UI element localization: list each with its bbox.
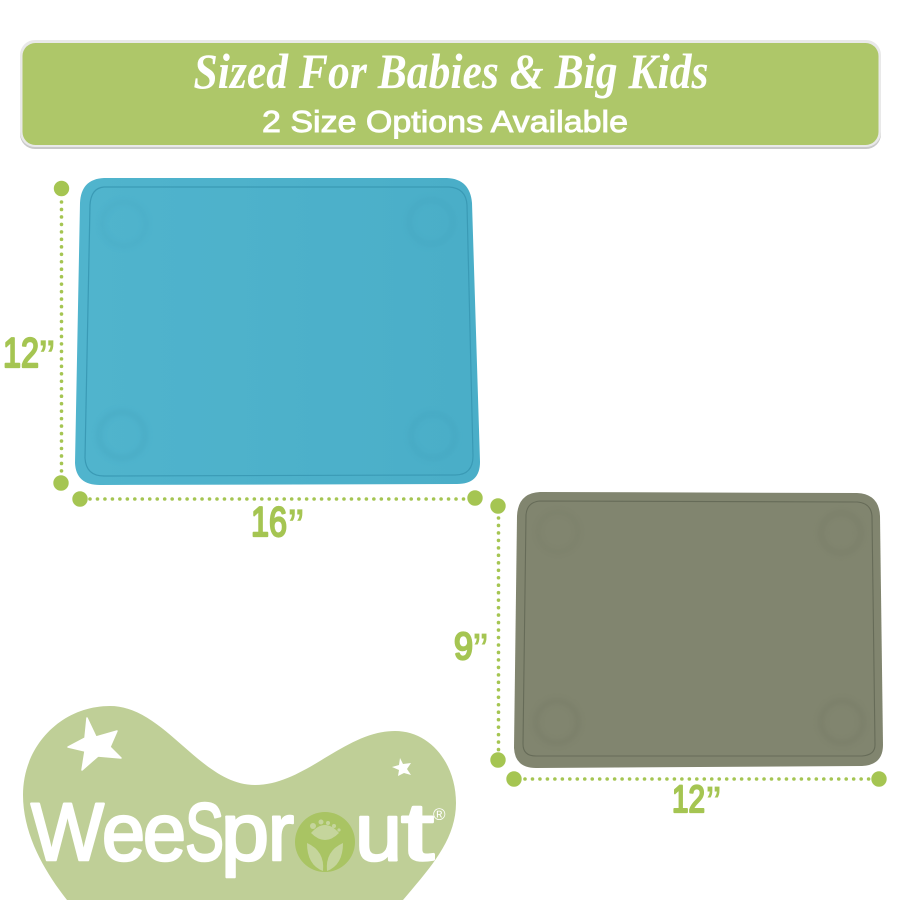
- dimension: 12 inch width, small mat: [506, 771, 887, 822]
- dimension: 16 inch width, large mat: [72, 490, 483, 546]
- small olive mat: [514, 492, 883, 768]
- suction cups: [99, 200, 455, 458]
- wordmark: e: [102, 787, 145, 878]
- wordmark: t: [401, 787, 434, 878]
- suction cups: [536, 512, 863, 743]
- heading: Sized For Babies & Big Kids: [194, 43, 708, 99]
- large blue mat: [75, 178, 480, 485]
- small star: [392, 758, 411, 776]
- wordmark: e: [143, 787, 186, 878]
- wordmark: [31, 787, 434, 878]
- sprout emblem: [295, 812, 355, 872]
- wordmark: S: [185, 787, 224, 878]
- dimension: 12 inch height, large mat: 12: [3, 329, 39, 376]
- dimension: 16 inch width, large mat: 16: [251, 498, 287, 545]
- dimension: 12 inch height, large mat: ”: [38, 333, 56, 377]
- logo blob: [23, 706, 456, 900]
- dimension: 12 inch width, small mat: ”: [705, 780, 722, 822]
- subheading: 2 Size Options Available: [262, 104, 628, 139]
- large star: [68, 718, 121, 770]
- dimension: 12 inch width, small mat: 12: [672, 779, 705, 821]
- WeeSprout logo: [23, 706, 456, 900]
- header banner: [20, 40, 881, 149]
- dimension: 12 inch height, large mat: [3, 181, 69, 491]
- wordmark: W: [31, 787, 105, 878]
- wordmark: o: [296, 787, 352, 878]
- dimension: 16 inch width, large mat: ”: [287, 502, 305, 546]
- dimension: 9 inch height, small mat: [454, 498, 506, 768]
- registered mark: ®: [433, 805, 446, 824]
- wordmark: u: [355, 787, 402, 878]
- wordmark: r: [268, 787, 294, 878]
- dimension: 9 inch height, small mat: 9: [454, 626, 473, 668]
- wordmark: p: [221, 787, 269, 878]
- dimension: 9 inch height, small mat: ”: [472, 627, 489, 669]
